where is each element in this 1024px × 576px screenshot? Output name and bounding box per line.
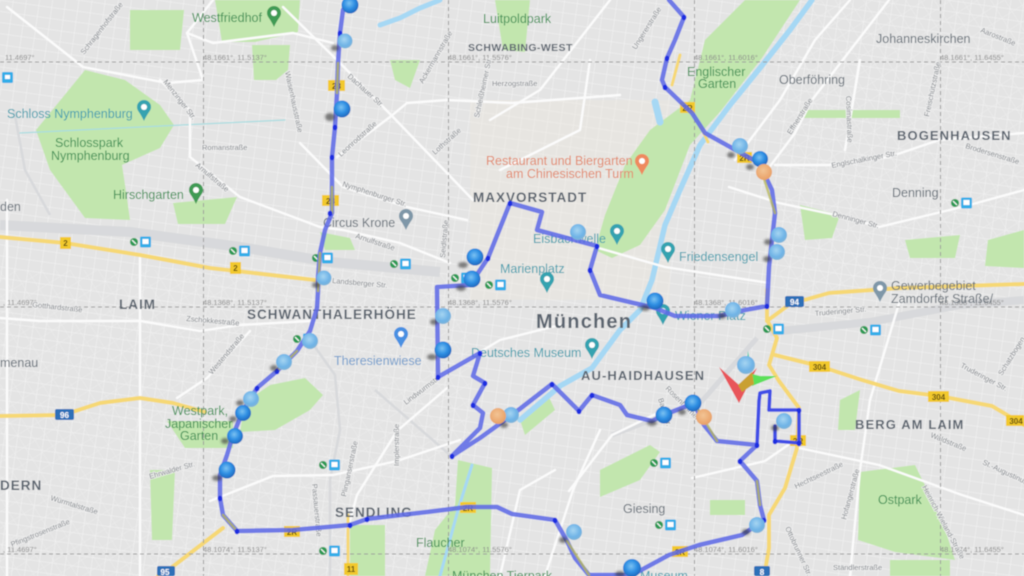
street name labels: Herzogstraße xyxy=(492,79,537,88)
street name labels: Würmtalstraße xyxy=(49,493,99,516)
district and place labels: Circus Krone xyxy=(323,216,395,230)
district and place labels: Giesing xyxy=(623,502,665,516)
road shields: 2R xyxy=(675,548,685,557)
street name labels: Schleißheimer Str. xyxy=(472,57,494,118)
street name labels: Dachauer Str. xyxy=(346,72,386,109)
street name labels: Rosenheimer xyxy=(664,384,702,422)
road shields: 28 xyxy=(332,82,341,91)
street name labels: Plinganserstraße xyxy=(339,440,360,497)
street name labels: Englschalkinger Str. xyxy=(831,148,897,170)
grid coordinate labels: 48.1368°, 11.5576° xyxy=(448,298,512,307)
street name labels: Freischützstraße xyxy=(922,61,943,117)
street name labels: Cosimastraße xyxy=(844,96,855,143)
road shields: 2R xyxy=(739,154,750,163)
orange GPS markers xyxy=(490,164,772,425)
street name labels: Passauerstraße xyxy=(310,483,324,537)
district and place labels: Hirschgarten xyxy=(113,188,184,202)
street name labels: Brodersenstraße xyxy=(964,141,1020,166)
road shields: 11 xyxy=(347,565,356,574)
district and place labels: Restaurant und Biergarten xyxy=(486,154,633,168)
street name labels: Hechtseestraße xyxy=(793,459,844,491)
district and place labels: menau xyxy=(0,356,38,370)
road shields: 28 xyxy=(326,197,335,206)
street name labels: Schragenhofstraße xyxy=(78,0,125,56)
street name labels: Leonrodstraße xyxy=(336,119,379,158)
district and place labels: Eisbachwelle xyxy=(533,232,606,246)
district and place labels: Wiener Platz xyxy=(675,309,746,323)
district and place labels: Nymphenburg xyxy=(51,149,130,163)
district and place labels: Friedensengel xyxy=(679,250,758,264)
road shields: 2R xyxy=(287,528,297,537)
district and place labels: Garten xyxy=(698,77,736,91)
street name labels: Arnulfstraße xyxy=(194,161,231,194)
district and place labels: SCHWANTHALERHÖHE xyxy=(247,307,417,322)
district and place labels: Gewerbegebiet xyxy=(891,279,976,293)
street name labels: Ehrwalder Str. xyxy=(148,459,196,481)
Isar river and lakes xyxy=(20,0,812,576)
street name labels: Ottobrunner Str. xyxy=(783,525,814,576)
district and place labels: LAIM xyxy=(119,297,156,312)
street name labels: Hofangerstraße xyxy=(839,468,861,521)
district and place labels: DERN xyxy=(0,478,42,493)
grid coordinate labels: 48.1368°, 11.6455° xyxy=(940,298,1004,307)
district and place labels: Japanischer xyxy=(165,417,232,431)
street name labels: Balanstr. xyxy=(656,397,674,427)
grid coordinate labels: , 11.4697° xyxy=(3,545,37,554)
street name labels: Ständlerstraße xyxy=(833,563,882,572)
street name labels: Gotthardstraße xyxy=(32,300,83,314)
grid coordinate labels: 48.1661°, 11.6016° xyxy=(694,53,758,62)
street name labels: Waldstraße xyxy=(929,431,968,453)
district and place labels: Garten xyxy=(180,429,218,443)
street name labels: Lothstraße xyxy=(430,126,463,156)
district and place labels: SCHWABING-WEST xyxy=(468,42,573,54)
marker shadows xyxy=(212,45,779,576)
road shields: 304 xyxy=(813,363,827,372)
direction arrow markers xyxy=(719,351,777,403)
road shields: 2 xyxy=(63,239,68,248)
grid coordinate labels: 48.1074°, 11.6016° xyxy=(694,545,758,554)
grid coordinate labels: 48.1368°, 11.5137° xyxy=(203,298,267,307)
street name labels: Ungererstraße xyxy=(630,5,663,51)
district and place labels: BERG AM LAIM xyxy=(855,417,964,432)
road shields: 2R xyxy=(793,437,803,446)
district and place labels: Schloss Nymphenburg xyxy=(7,107,133,121)
district and place labels: Englischer xyxy=(687,65,745,79)
street name labels: Implerstraße xyxy=(392,424,401,466)
district and place labels: AU-HAIDHAUSEN xyxy=(581,368,705,383)
street name labels: Nymphenburger Str. xyxy=(341,179,408,209)
district and place labels: Theresienwiese xyxy=(334,354,422,368)
street name labels: Menzinger Str. xyxy=(161,78,198,121)
grid coordinate labels: 48.1074°, 11.5576° xyxy=(448,545,512,554)
grid coordinate labels: 11.4697° xyxy=(5,53,35,62)
road shields: 2R xyxy=(463,504,473,513)
street name labels: Romanstraße xyxy=(202,143,247,152)
street name labels: Denninger Str. xyxy=(831,209,880,230)
light blue GPS markers xyxy=(243,34,792,540)
transit station icons xyxy=(2,72,972,556)
grid coordinate labels: 48.1661°, 11.6455° xyxy=(940,53,1004,62)
street name labels: Truderinger Str. xyxy=(814,305,867,318)
grid coordinate labels: 48.1661°, 11.5137° xyxy=(203,53,267,62)
street name labels: Lindwurmstr. xyxy=(402,374,441,407)
district and place labels: Flaucher xyxy=(416,536,465,550)
district and place labels: Johanneskirchen xyxy=(876,32,971,46)
district and place labels: Westpark, xyxy=(172,404,228,418)
grid coordinate labels: 48.1074°, 11.5137° xyxy=(203,545,267,554)
grid coordinate labels: , 11.4697° xyxy=(3,298,37,307)
street name labels: Ackermannstraße xyxy=(417,29,454,85)
district and place labels: Oberföhring xyxy=(779,73,845,87)
street name labels: Aarostraße xyxy=(979,26,1017,48)
district and place labels: München xyxy=(536,311,632,333)
district and place labels: BOGENHAUSEN xyxy=(897,128,1012,143)
place pins xyxy=(137,6,887,359)
street name labels: Truderinger Str. xyxy=(959,361,1009,393)
district and place labels: Deutsches Museum xyxy=(471,346,581,360)
street name labels: Heinrich-Wieland-Straße xyxy=(920,484,967,560)
district and place labels: Ostpark xyxy=(878,493,923,507)
road shields: 2R xyxy=(682,104,693,113)
district and place labels: SENDLING xyxy=(335,505,413,520)
district and place labels: Westfriedhof xyxy=(192,11,262,25)
district and place labels: Zamdorfer Straße/ xyxy=(891,292,994,306)
district and place labels: Marienplatz xyxy=(500,262,565,276)
street name labels: Westendstraße xyxy=(207,332,246,376)
grid coordinate labels: 48.1368°, 11.6016° xyxy=(694,298,758,307)
district and place labels: Denning xyxy=(892,186,939,200)
district and place labels: Schlosspark xyxy=(55,136,124,150)
district and place labels: den xyxy=(0,200,21,214)
street name labels: Effnerstraße xyxy=(785,96,814,136)
district and place labels: am Chinesischen Turm xyxy=(506,167,634,181)
road shields: 304 xyxy=(1009,417,1023,426)
street name labels: Seidlstraße xyxy=(438,220,450,258)
road shields: 96 xyxy=(60,411,69,420)
GPS route xyxy=(220,0,799,575)
road shields: 2 xyxy=(233,264,238,273)
district and place labels: Luitpoldpark xyxy=(483,12,552,26)
street name labels: Waisenhausstraße xyxy=(283,71,305,133)
grid coordinate labels: 48.1074°, 11.6455° xyxy=(940,545,1004,554)
street name labels: Arnulfstraße xyxy=(354,231,396,253)
dark blue GPS markers xyxy=(218,0,768,576)
road shields: 304 xyxy=(932,393,946,402)
street name labels: Landsberger Str. xyxy=(332,276,388,290)
grid coordinate labels: 48.1661°, 11.5576° xyxy=(448,53,512,62)
street name labels: Zschokkestraße xyxy=(186,314,240,328)
road shields: 94 xyxy=(790,298,799,307)
district and place labels: MAXVORSTADT xyxy=(473,190,587,205)
street name labels: Pfingstrosenstraße xyxy=(9,517,71,549)
